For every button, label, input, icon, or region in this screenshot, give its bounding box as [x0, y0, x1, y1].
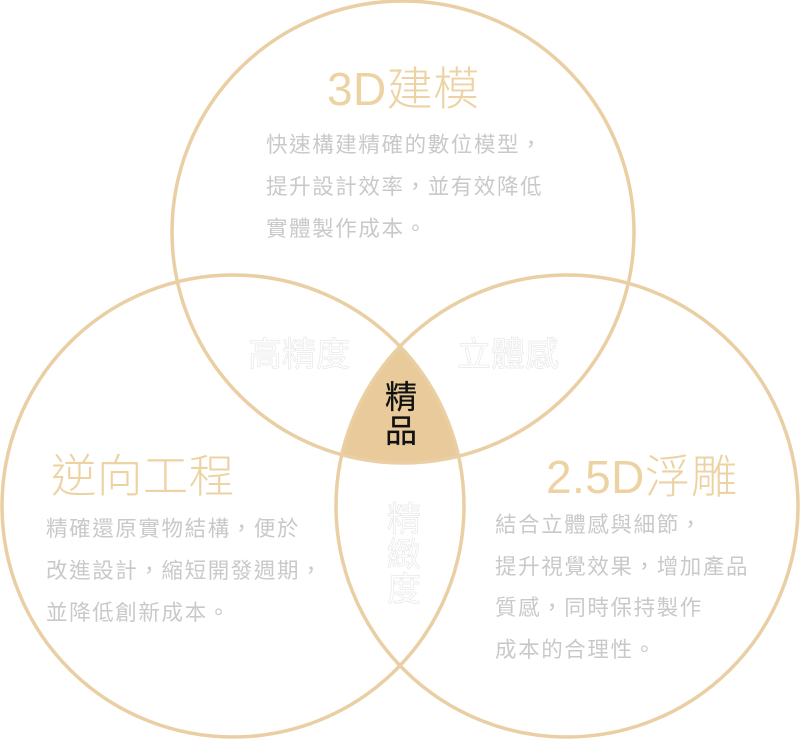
text block: 2.5D relief description: 質感，同時保持製作 — [495, 596, 703, 620]
text block: 2.5D relief description: 結合立體感與細節， — [495, 513, 703, 537]
text block: 2.5D relief description: 成本的合理性。 — [495, 638, 657, 662]
label: stereoscopic overlap: 立體感 — [457, 336, 559, 374]
heading: 3D modeling: 3D建模 — [327, 63, 479, 115]
heading: reverse engineering: 逆向工程 — [51, 451, 235, 502]
text block: 3D modeling description: 提升設計效率，並有效降低 — [266, 175, 543, 199]
text block: 3D modeling description: 快速構建精確的數位模型， — [266, 133, 543, 157]
text block: 3D modeling description: 實體製作成本。 — [266, 217, 428, 241]
center wedge: overlap of all three circles — [344, 349, 456, 462]
label: fine detail overlap (vertical): 精 — [387, 501, 421, 539]
circle: reverse engineering — [2, 275, 464, 737]
heading: 2.5D relief: 2.5D浮雕 — [546, 451, 738, 503]
text block: 2.5D relief description — [495, 513, 749, 662]
text block: 2.5D relief description: 提升視覺效果，增加產品 — [495, 555, 749, 579]
text block: reverse engineering description: 精確還原實物結構，便於 — [46, 517, 300, 541]
label: center premium: 品 — [385, 413, 417, 449]
label: center premium: 精 — [385, 379, 417, 415]
text block: reverse engineering description: 並降低創新成本。 — [46, 601, 231, 625]
circle: 2.5D relief — [336, 275, 798, 737]
circle: 3D modeling — [172, 1, 634, 463]
text block: reverse engineering description — [46, 517, 323, 625]
text block: reverse engineering description: 改進設計，縮短開發週期， — [46, 559, 323, 583]
label: high precision overlap: 高精度 — [248, 336, 350, 374]
label: center premium — [385, 379, 417, 449]
label: fine detail overlap (vertical): 度 — [387, 571, 421, 609]
text block: 3D modeling description — [266, 133, 543, 241]
label: fine detail overlap (vertical): 緻 — [387, 536, 421, 574]
label: fine detail overlap (vertical) — [387, 501, 421, 609]
